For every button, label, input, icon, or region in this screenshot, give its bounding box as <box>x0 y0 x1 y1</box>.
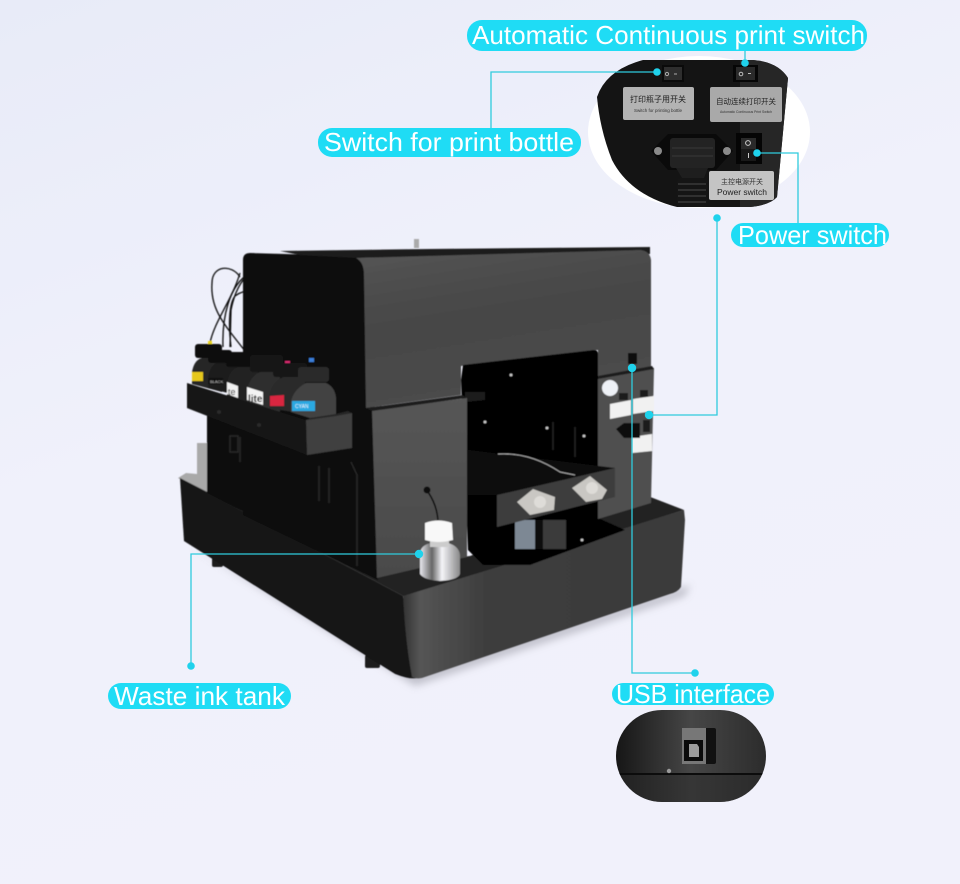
bottle tray <box>187 383 352 455</box>
base left face <box>180 478 417 678</box>
label: bottle switch: Switch for printing bottle <box>634 108 683 113</box>
small rear panel <box>602 380 654 453</box>
usb port <box>682 728 716 764</box>
label: USB interface: USB interface <box>616 679 770 709</box>
window screws <box>484 374 585 541</box>
base right face <box>403 510 685 678</box>
bottle cyan <box>291 367 336 418</box>
label: continuous switch <box>710 87 782 122</box>
bottle black <box>208 350 240 396</box>
label: power switch: 主控电源开关 <box>721 177 763 186</box>
bottle white 1: te <box>228 387 236 397</box>
line: print bottle switch <box>491 68 661 128</box>
carriage bar <box>497 468 615 527</box>
bottle magenta <box>269 363 307 414</box>
printer illustration <box>178 239 690 686</box>
plug <box>616 423 640 438</box>
upper front face <box>356 250 651 408</box>
power rocker switch <box>736 133 762 164</box>
white ellipse <box>588 56 810 208</box>
bottle cyan: CYAN <box>295 404 309 410</box>
bottle yellow <box>192 344 222 392</box>
power plug <box>651 134 733 208</box>
stepper motor <box>515 520 566 549</box>
bottle white 2 <box>247 355 283 412</box>
switches <box>619 390 650 432</box>
bottle switch <box>662 65 684 82</box>
label: bottle switch <box>623 87 694 120</box>
label: continuous switch: Automatic Continuous Print Switch <box>720 110 772 114</box>
lower box side <box>207 410 378 580</box>
tube markers <box>208 341 314 365</box>
line: waste tank <box>187 550 423 670</box>
label: Power switch: Power switch <box>738 220 887 250</box>
flange 2 <box>572 476 607 502</box>
label: power switch <box>709 171 774 200</box>
logo sticker <box>602 380 618 396</box>
body rear side <box>243 253 378 580</box>
label: bottle switch: 打印瓶子用开关 <box>630 94 686 104</box>
continuous print switch <box>733 65 758 82</box>
bottle black: BLACK <box>210 379 223 384</box>
waste hole and tube <box>424 486 438 521</box>
feet <box>212 555 380 668</box>
top inset: switch panel <box>588 55 810 210</box>
tubes <box>210 268 310 360</box>
label: power switch: Power switch <box>717 187 767 197</box>
usb inset <box>616 710 766 802</box>
ink bottles <box>192 344 336 418</box>
line: panel pointer <box>645 214 721 419</box>
rear black switch <box>628 353 637 364</box>
roof <box>280 247 650 258</box>
top knob <box>414 239 419 248</box>
line: usb <box>628 364 699 677</box>
window rod details <box>465 392 576 457</box>
right pillar <box>598 368 654 519</box>
printing window <box>461 350 625 565</box>
label: Waste ink tank: Waste ink tank <box>114 681 286 711</box>
ground shadow <box>190 545 690 686</box>
base top <box>180 478 684 596</box>
pillar top edge <box>598 366 654 379</box>
wire on carriage <box>498 454 575 475</box>
box side slots <box>230 436 357 566</box>
flange 1 <box>517 489 555 515</box>
carriage rail <box>468 450 615 495</box>
label: Switch for print bottle: Switch for print bottle <box>324 127 574 157</box>
label: Automatic Continuous print switch: Automatic Continuous print switch <box>472 20 865 50</box>
bottle white 1 <box>226 352 258 405</box>
line: power switch <box>753 149 798 223</box>
pillar top edge <box>366 395 466 411</box>
bottle white 2: lite <box>248 394 263 405</box>
left pillar <box>372 398 467 578</box>
line: continuous print switch <box>741 51 749 67</box>
black panel <box>597 60 788 207</box>
waste ink bottle <box>420 520 460 581</box>
sticker labels <box>610 396 654 453</box>
callout lines <box>187 51 798 677</box>
label: continuous switch: 自动连续打印开关 <box>716 96 776 106</box>
rear silver part <box>178 443 207 495</box>
